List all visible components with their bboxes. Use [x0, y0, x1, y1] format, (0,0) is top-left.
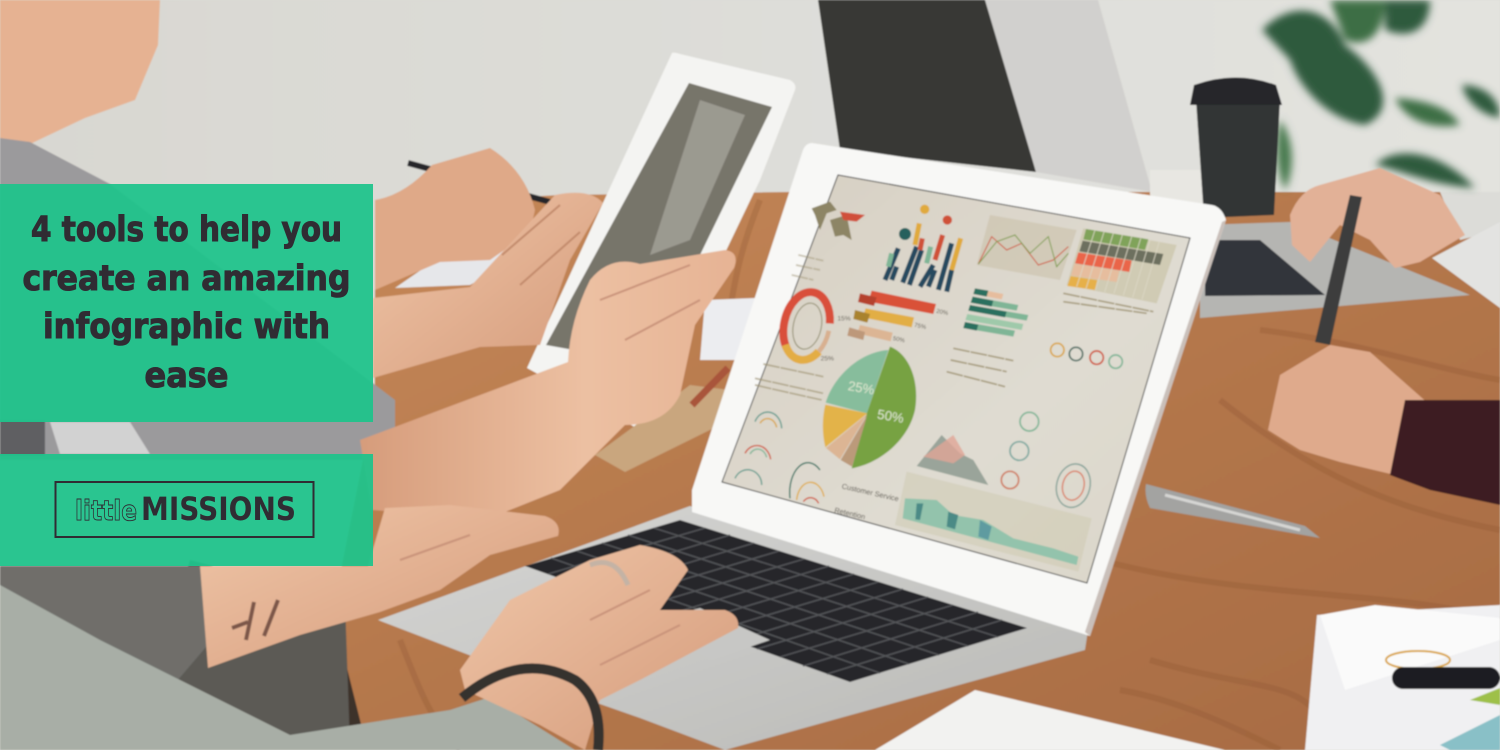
green title panel — [0, 184, 373, 422]
logo: little — [75, 494, 137, 527]
pie labels: 50% — [876, 407, 905, 426]
logo — [56, 482, 314, 537]
title: 4 tools to help you — [31, 210, 342, 250]
tattoo — [232, 600, 278, 640]
donut labels: 25% — [821, 356, 834, 363]
background laptop — [985, 0, 1470, 318]
wooden table — [320, 192, 1500, 750]
donut labels: 15% — [837, 316, 851, 323]
coffee cup — [1190, 78, 1282, 218]
small ring charts — [1001, 343, 1122, 511]
logo: MISSIONS — [141, 490, 296, 528]
white device at right — [1432, 222, 1500, 308]
standing person — [818, 0, 1036, 172]
pie chart — [823, 347, 916, 468]
title — [22, 210, 350, 396]
bar labels: 75% — [914, 323, 927, 331]
donut labels — [821, 316, 851, 363]
world map — [812, 202, 865, 240]
mountain area chart — [917, 435, 988, 485]
screen legend text: Customer Service — [841, 482, 900, 503]
pie labels: 25% — [847, 378, 876, 398]
bar labels — [892, 309, 949, 345]
arm holding tablet — [373, 193, 603, 378]
bottom arm sleeve — [0, 585, 575, 750]
laptop base — [378, 506, 1088, 750]
stacked horizontal bars — [963, 288, 1028, 337]
paper under the hands — [395, 222, 525, 288]
screen legend text — [834, 482, 900, 521]
upper right hand — [1290, 168, 1465, 268]
front sleeve left — [0, 566, 212, 695]
front left arm — [360, 250, 736, 518]
dark sleeve — [1390, 400, 1500, 505]
paper at bottom — [875, 690, 1225, 750]
donut chart — [777, 288, 836, 364]
hinge line — [715, 517, 1035, 615]
bar labels: 50% — [892, 336, 906, 345]
plant — [1262, 0, 1500, 190]
body text — [755, 255, 1153, 400]
wall background — [0, 0, 1500, 300]
upright black pen — [1315, 195, 1362, 345]
printed papers right — [1305, 605, 1500, 750]
bottom column chart — [895, 472, 1092, 572]
heatmap — [1067, 228, 1177, 303]
trackpad — [640, 608, 770, 660]
line chart — [977, 215, 1077, 280]
bottom hand — [460, 545, 738, 750]
person at top left — [0, 0, 395, 460]
front hand — [200, 505, 559, 668]
hand with pen — [375, 148, 550, 290]
tablet — [527, 53, 795, 430]
ring — [590, 562, 628, 585]
notebook — [595, 298, 755, 472]
screen legend text: Retention — [834, 506, 866, 521]
title: create an amazing — [22, 259, 350, 299]
bar labels: 20% — [936, 309, 949, 317]
screen infographic — [735, 202, 1177, 572]
pale wall strip at right — [1440, 192, 1500, 240]
horizontal bars — [847, 291, 936, 341]
bracelet — [462, 668, 599, 750]
silver pen on table — [1146, 484, 1320, 538]
main laptop — [378, 143, 1226, 750]
laptop lid — [692, 143, 1226, 636]
bar chart — [885, 205, 961, 292]
title: infographic with — [43, 307, 330, 347]
rainbow arcs — [735, 412, 824, 503]
pie labels — [847, 378, 905, 426]
keyboard — [525, 520, 1027, 682]
green logo panel — [0, 454, 373, 566]
title: ease — [144, 356, 228, 396]
lower right hand — [1268, 345, 1430, 475]
dark trousers — [140, 560, 350, 750]
screen — [722, 175, 1190, 583]
